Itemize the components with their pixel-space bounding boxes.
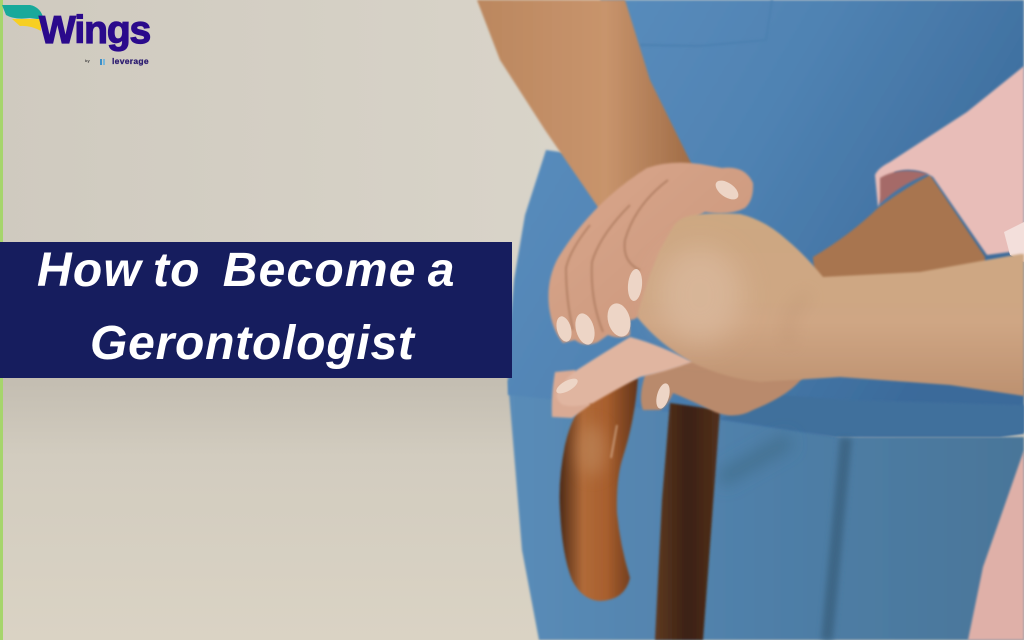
wrist shadow (788, 295, 808, 345)
title line 1: How to Become a (37, 244, 456, 297)
patient finger behind (552, 370, 590, 418)
patient hand and forearm (637, 213, 1024, 396)
logo bars icon (100, 59, 107, 65)
wall (0, 0, 1024, 385)
scrub pants (508, 380, 1024, 640)
sleeve inner shadow (880, 171, 928, 204)
pink sleeve (875, 66, 1024, 262)
cane handle (560, 378, 638, 601)
scrub hem shadow (720, 395, 1024, 436)
pink sleeve cuff (1004, 222, 1024, 262)
cane shaft (655, 403, 720, 640)
scrub pocket seam (640, 0, 772, 46)
finger separators (566, 180, 668, 332)
pants crease (827, 438, 846, 640)
pants fold (720, 440, 790, 480)
title banner (0, 242, 512, 378)
pink clothing lower right (968, 450, 1024, 640)
handle highlight (611, 425, 617, 458)
logo byline: by (85, 58, 90, 63)
logo: Wings by leverage (2, 5, 150, 66)
title line 2: Gerontologist (90, 317, 415, 370)
patient lower fingers (641, 360, 803, 416)
hand light area (658, 247, 742, 343)
handle light patch (578, 424, 606, 476)
floor (0, 378, 1024, 640)
logo leverage text: leverage (112, 56, 149, 66)
nurse forearm (477, 0, 692, 210)
nurse scrub top (508, 0, 1024, 437)
fingernails (554, 177, 742, 410)
logo wordmark: Wings (39, 9, 150, 52)
nurse hand and fingers (548, 163, 753, 345)
left green edge strip (0, 0, 3, 640)
patient thumb (557, 337, 692, 406)
patient upper arm (813, 175, 985, 285)
logo swoosh icon (2, 5, 43, 31)
